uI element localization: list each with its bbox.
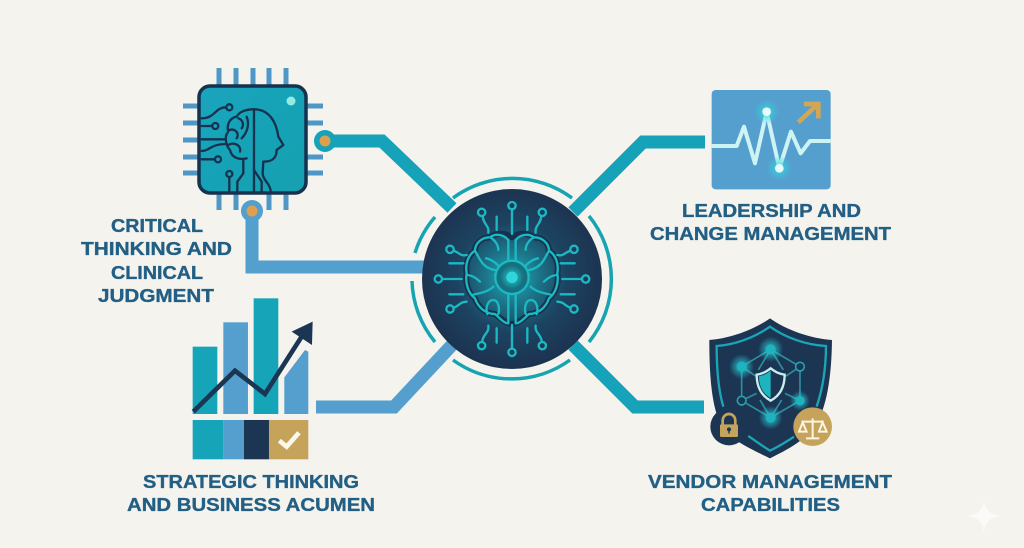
shield inner outline (717, 327, 826, 451)
heading: critical thinking and clinical judgment: CLINICAL (111, 263, 203, 283)
heading: strategic thinking and business acumen (127, 472, 375, 515)
heading: critical thinking and clinical judgment (81, 216, 232, 306)
heading: vendor management capabilities: CAPABILITIES (701, 495, 840, 515)
trend arrow (193, 322, 313, 412)
segmented outer ring (412, 178, 611, 379)
main artwork (81, 68, 1000, 532)
icon: rising bar chart (193, 298, 313, 459)
pulse line (712, 112, 831, 168)
vertical traces (508, 202, 516, 356)
gold growth arrow (798, 104, 818, 122)
connector: hub to vendor shield (573, 345, 704, 407)
connector: bar chart to hub (316, 345, 452, 407)
heading: critical thinking and clinical judgment: THINKING AND (81, 239, 232, 259)
heading: vendor management capabilities (648, 472, 892, 515)
hub disc (422, 189, 602, 369)
bars (193, 298, 308, 414)
heading: leadership and change management (650, 201, 891, 244)
icon: vendor security shield (709, 318, 832, 458)
network nodes (729, 337, 810, 430)
icon: leadership pulse panel (712, 90, 831, 189)
heading: leadership and change management: LEADERSHIP AND (682, 201, 861, 221)
chip pins (183, 68, 323, 210)
panel background (712, 90, 831, 189)
node: chip right connector (314, 130, 336, 152)
brain circuitry (435, 202, 589, 356)
lock badge (710, 408, 748, 445)
left half of the brain (435, 209, 508, 349)
legend strip with check (193, 420, 308, 459)
central hub: AI brain (412, 178, 611, 379)
right half of the brain (mirror) (516, 209, 589, 349)
heading: leadership and change management: CHANGE MANAGEMENT (650, 224, 891, 244)
dark brain halo (466, 234, 558, 324)
glowing core (495, 261, 529, 294)
scales badge (793, 407, 832, 446)
connector: chip lower node to hub (252, 211, 424, 267)
chip highlight dot (286, 96, 296, 106)
heading: critical thinking and clinical judgment: JUDGMENT (98, 286, 214, 306)
heading: strategic thinking and business acumen: STRATEGIC THINKING (143, 472, 359, 492)
pulse glow top (754, 99, 779, 124)
shield body (709, 318, 832, 458)
pulse glow bottom (767, 156, 792, 181)
icon: AI chip with brain and head (183, 68, 323, 210)
heading: vendor management capabilities: VENDOR MANAGEMENT (648, 472, 892, 492)
icon: corner sparkle (968, 500, 1000, 532)
small centre shield (757, 368, 785, 401)
network lines (742, 349, 800, 418)
connector: hub to leadership panel (573, 142, 705, 212)
node: chip bottom connector (241, 200, 263, 222)
heading: strategic thinking and business acumen: AND BUSINESS ACUMEN (127, 495, 375, 515)
heading: critical thinking and clinical judgment: CRITICAL (111, 216, 203, 236)
connector: chip to hub (325, 141, 452, 208)
brain and head line art (202, 104, 283, 192)
chip body (199, 86, 306, 193)
